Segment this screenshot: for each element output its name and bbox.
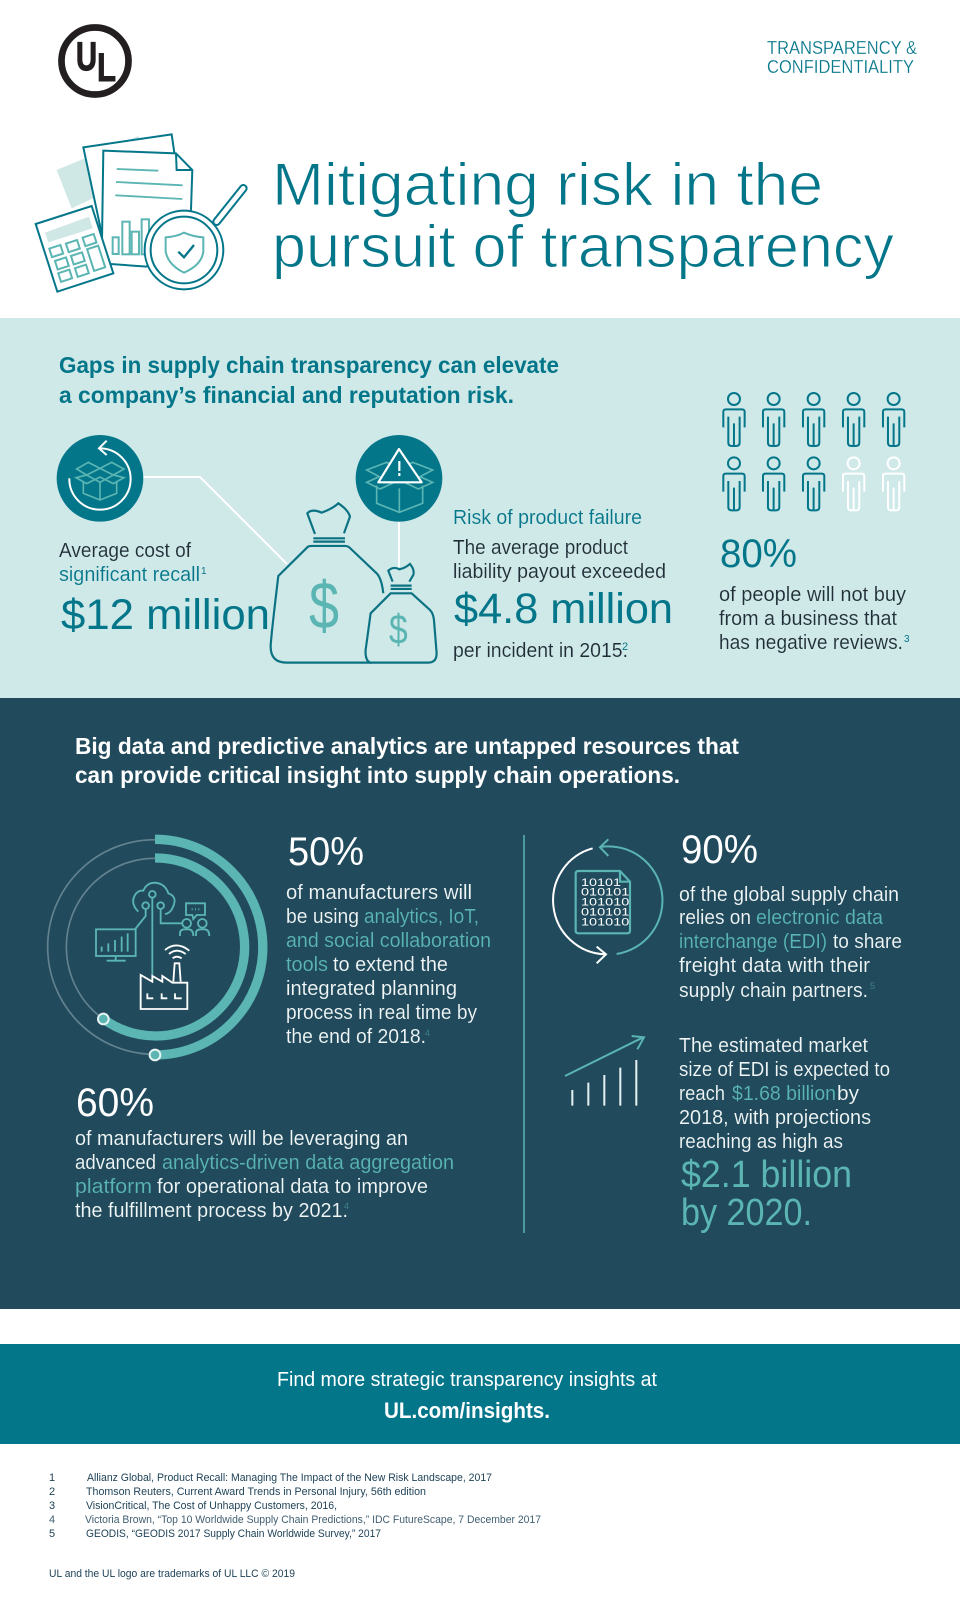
- footnotes: GEODIS, “GEODIS 2017 Supply Chain Worldwide Survey,” 2017: [86, 1528, 381, 1540]
- stat: 60 percent: [75, 1081, 454, 1222]
- icon: recall box: [57, 435, 143, 522]
- icon: EDI document cycle: 010101: [581, 907, 629, 919]
- stat: 90 percent: of the global supply chain: [679, 884, 899, 906]
- stat: EDI market size: $1.68 billion: [732, 1083, 836, 1105]
- divider: [523, 835, 525, 1233]
- stat: 90 percent: freight data with their: [679, 955, 870, 977]
- stat: 90 percent: electronic data: [756, 907, 884, 929]
- heading: big data: can provide critical insight into supply chain operations.: [75, 762, 680, 788]
- heading: big data: [75, 733, 739, 788]
- footnotes: [49, 1472, 541, 1540]
- recall text: significant recall: [59, 564, 200, 586]
- recall text: $12 million: [61, 591, 270, 639]
- stat: 50 percent: to extend the: [333, 954, 448, 976]
- footnotes: 2: [49, 1486, 55, 1498]
- stat: EDI market size: $2.1 billion: [681, 1154, 852, 1196]
- stat: EDI market size: The estimated market: [679, 1035, 868, 1057]
- panel: financial and reputation risk: [0, 318, 960, 698]
- trademark line: UL and the UL logo are trademarks of UL LLC © 2019: [49, 1568, 295, 1580]
- connector lines: [143, 477, 399, 567]
- stat: 80 percent: [719, 532, 910, 654]
- category label: TRANSPARENCY &: [767, 38, 917, 58]
- product failure text: 2: [622, 641, 628, 653]
- stat: 90 percent: 5: [870, 981, 875, 991]
- stat: 60 percent: of manufacturers will be leveraging an: [75, 1128, 408, 1150]
- header: logo and category: [62, 28, 917, 94]
- panel: call to action: UL.com/insights.: [384, 1398, 550, 1423]
- stat: 60 percent: 4: [344, 1201, 349, 1211]
- footnotes: VisionCritical, The Cost of Unhappy Customers, 2016,: [86, 1500, 337, 1512]
- icon: EDI document cycle: 10101: [581, 877, 621, 889]
- icon: money bags: $: [309, 569, 339, 643]
- stat: 50 percent: 50%: [288, 830, 364, 874]
- stat: 60 percent: 60%: [76, 1081, 154, 1125]
- heading: risk: [59, 352, 559, 408]
- stat: 80 percent: 3: [904, 634, 910, 645]
- category label: [767, 38, 917, 77]
- stat: 50 percent: [286, 830, 491, 1048]
- stat: 60 percent: advanced: [75, 1152, 156, 1174]
- recall text: Average cost of: [59, 540, 191, 562]
- stat: 50 percent: process in real time by: [286, 1002, 477, 1024]
- stat: EDI market size: reach: [679, 1083, 725, 1105]
- stat: 90 percent: [679, 828, 902, 1002]
- stat: 90 percent: interchange (EDI): [679, 931, 827, 953]
- icon: EDI document cycle: 010101: [581, 887, 629, 899]
- footnotes: Victoria Brown, “Top 10 Worldwide Supply Chain Predictions,” IDC FutureScape, 7 December 2017: [85, 1514, 541, 1526]
- icon: ten people pictogram, eight highlighted: [723, 393, 904, 510]
- stat: EDI market size: by 2020.: [681, 1192, 812, 1234]
- category label: CONFIDENTIALITY: [767, 57, 914, 77]
- icon: money bags: $: [389, 605, 408, 652]
- icon: EDI document cycle: 101010: [581, 897, 629, 909]
- chart: progress rings: [48, 839, 263, 1060]
- stat: EDI market size: 2018, with projections: [679, 1107, 871, 1129]
- panel: call to action: Find more strategic transparency insights at: [277, 1369, 657, 1391]
- stat: 80 percent: from a business that: [719, 608, 897, 630]
- title: Mitigating risk in the: [272, 151, 823, 218]
- stat: 80 percent: 80%: [720, 532, 797, 576]
- title: [272, 151, 894, 280]
- stat: EDI market size: by: [837, 1083, 859, 1105]
- icon: EDI document cycle: [553, 839, 662, 963]
- stat: 90 percent: supply chain partners.: [679, 980, 868, 1002]
- footnotes: 1: [49, 1472, 55, 1484]
- icon: rising bar chart with arrow: [565, 1036, 644, 1106]
- stat: 60 percent: platform: [75, 1176, 152, 1198]
- stat: 80 percent: has negative reviews.: [719, 632, 903, 654]
- recall text: 1: [201, 566, 207, 577]
- stat: 50 percent: the end of 2018.: [286, 1026, 426, 1048]
- footnotes: Thomson Reuters, Current Award Trends in Personal Injury, 56th edition: [86, 1486, 426, 1498]
- stat: 80 percent: of people will not buy: [719, 584, 906, 606]
- stat: 90 percent: 90%: [681, 828, 758, 872]
- stat: 50 percent: tools: [286, 954, 328, 976]
- stat: 50 percent: be using: [286, 906, 359, 928]
- stat: 90 percent: to share: [833, 931, 902, 953]
- stat: 50 percent: integrated planning: [286, 978, 457, 1000]
- recall text: [59, 540, 270, 639]
- heading: risk: Gaps in supply chain transparency can elevate: [59, 352, 559, 378]
- product failure text: $4.8 million: [454, 585, 673, 633]
- icon: EDI document cycle: 101010: [581, 917, 629, 929]
- panel: big data and predictive analytics: [0, 698, 960, 1309]
- icon: product failure warning: [356, 435, 442, 522]
- product failure text: The average product: [453, 537, 628, 559]
- product failure text: Risk of product failure: [453, 507, 642, 529]
- stat: 50 percent: and social collaboration: [286, 930, 491, 952]
- stat: 90 percent: relies on: [679, 907, 751, 929]
- icon: UL logo: [62, 28, 128, 94]
- icon: money bags: [271, 503, 437, 663]
- icon: connected factory: [96, 883, 209, 1009]
- stat: 60 percent: for operational data to improve: [157, 1176, 428, 1198]
- stat: 60 percent: the fulfillment process by 2021.: [75, 1200, 348, 1222]
- stat: 50 percent: analytics, IoT,: [364, 906, 479, 928]
- stat: 60 percent: analytics-driven data aggregation: [162, 1152, 454, 1174]
- stat: EDI market size: reaching as high as: [679, 1131, 843, 1153]
- footnotes: Allianz Global, Product Recall: Managing The Impact of the New Risk Landscape, 2017: [87, 1472, 492, 1484]
- stat: EDI market size: size of EDI is expected to: [679, 1059, 890, 1081]
- footnotes: 3: [49, 1500, 55, 1512]
- stat: 50 percent: 4: [425, 1028, 430, 1038]
- stat: EDI market size: [679, 1035, 890, 1234]
- footnotes: 4: [49, 1514, 55, 1526]
- stat: 50 percent: of manufacturers will: [286, 882, 472, 904]
- product failure text: [453, 507, 673, 662]
- icon: UL logo: L: [97, 46, 116, 90]
- footnotes: 5: [49, 1528, 55, 1540]
- icon: documents, calculator and magnifier: [36, 134, 243, 292]
- product failure text: per incident in 2015.: [453, 640, 628, 662]
- panel: call to action: [0, 1344, 960, 1444]
- title: pursuit of transparency: [272, 213, 894, 280]
- icon: UL logo: U: [76, 35, 97, 79]
- heading: risk: a company’s financial and reputation risk.: [59, 382, 514, 408]
- product failure text: liability payout exceeded: [453, 561, 666, 583]
- heading: big data: Big data and predictive analytics are untapped resources that: [75, 733, 739, 759]
